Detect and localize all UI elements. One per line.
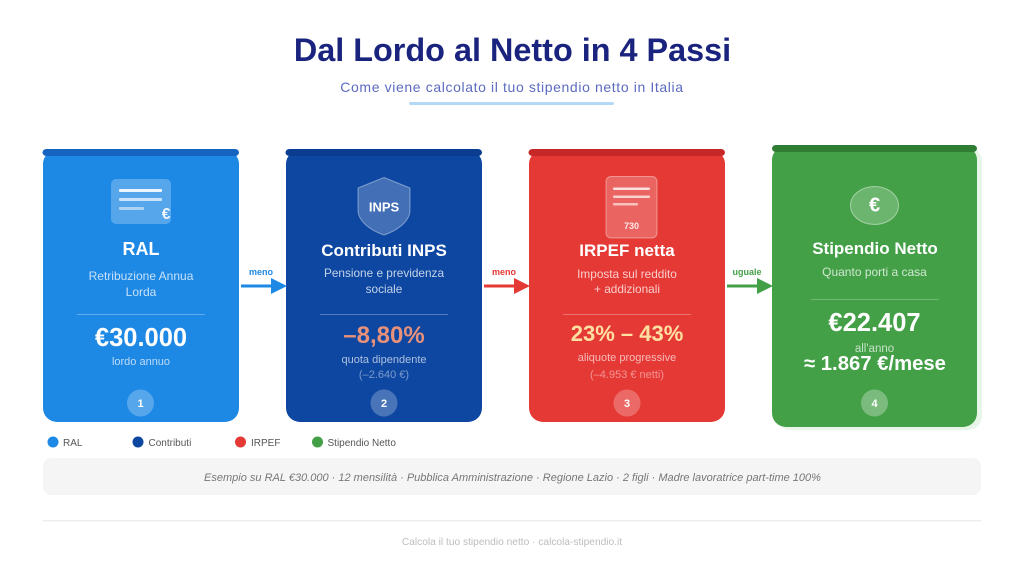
value caption: lordo annuo [112,356,170,368]
monthly value: ≈ 1.867 €/mese [804,353,946,375]
legend item: IRPEF: IRPEF [251,438,280,449]
step badge [614,390,640,416]
panel top band [772,145,977,152]
legend item: RAL [48,436,83,449]
value caption: all'anno [855,343,894,355]
legend item: RAL: RAL [63,438,83,449]
value: 23% – 43% [571,321,683,346]
panel: RAL [42,149,239,422]
panel description: Pensione e previdenza [324,266,444,280]
value caption: aliquote progressive [578,352,676,364]
panel: Stipendio Netto [772,145,982,430]
legend item: Contributi [132,436,191,449]
title underline [409,102,614,105]
arrow: Contributi to IRPEF [484,267,530,294]
panel heading: IRPEF netta [579,241,675,260]
value: €30.000 [95,324,187,352]
panel top band [528,149,725,156]
note panel [43,458,981,495]
arrow: IRPEF to Netto: uguale [732,267,762,277]
value: –8,80% [343,322,425,349]
panel description: Quanto porti a casa [822,265,927,279]
panel: Contributi INPS [286,149,482,422]
panel description line 2: sociale [366,282,403,296]
panel heading: Stipendio Netto [812,239,938,258]
arrow: Contributi to IRPEF: meno [492,267,516,277]
panel top band [42,149,239,156]
icon: shield [358,178,410,235]
icon: payslip [111,179,171,224]
note panel: Esempio su RAL €30.000 · 12 mensilità · Pubblica Amministrazione · Regione Lazio · 2 figli · Madre lavoratrice part-time 100% [204,472,821,484]
panel heading: Contributi INPS [321,241,447,260]
icon: shield: INPS [369,200,399,214]
value: €22.407 [828,309,921,337]
subtitle: Come viene calcolato il tuo stipendio netto in Italia [340,79,684,95]
panel description: Retribuzione Annua [89,269,194,283]
value caption: quota dipendente [341,354,427,366]
panel: IRPEF netta [528,149,725,422]
icon: form 730: 730 [624,221,639,231]
icon: euro coin: € [869,194,880,216]
icon: payslip: € [162,206,171,223]
value note: (–2.640 €) [359,369,409,381]
step badge [861,390,888,416]
panel description line 2: Lorda [126,285,157,299]
step badge: 2 [381,398,387,410]
legend item: Stipendio Netto: Stipendio Netto [328,438,396,449]
footer: Calcola il tuo stipendio netto · calcola-stipendio.it [402,537,622,548]
icon: form 730 [606,176,657,238]
panel description line 2: + addizionali [594,282,660,296]
legend item: Contributi: Contributi [148,438,191,449]
panel top band [286,149,482,156]
legend item: IRPEF [235,436,280,449]
legend [48,436,396,449]
arrow: IRPEF to Netto [727,267,773,294]
arrow: RAL to Contributi: meno [249,267,273,277]
step badge: 1 [137,398,144,410]
step badge [370,390,398,416]
step badge [127,390,154,416]
step badge: 4 [871,398,878,410]
icon: euro coin [850,186,898,224]
panel description: Imposta sul reddito [577,267,677,281]
panel heading: RAL [122,239,160,259]
arrow: RAL to Contributi [241,267,287,294]
title: Dal Lordo al Netto in 4 Passi [294,32,731,68]
step badge: 3 [624,398,630,410]
value note: (–4.953 € netti) [590,369,664,381]
